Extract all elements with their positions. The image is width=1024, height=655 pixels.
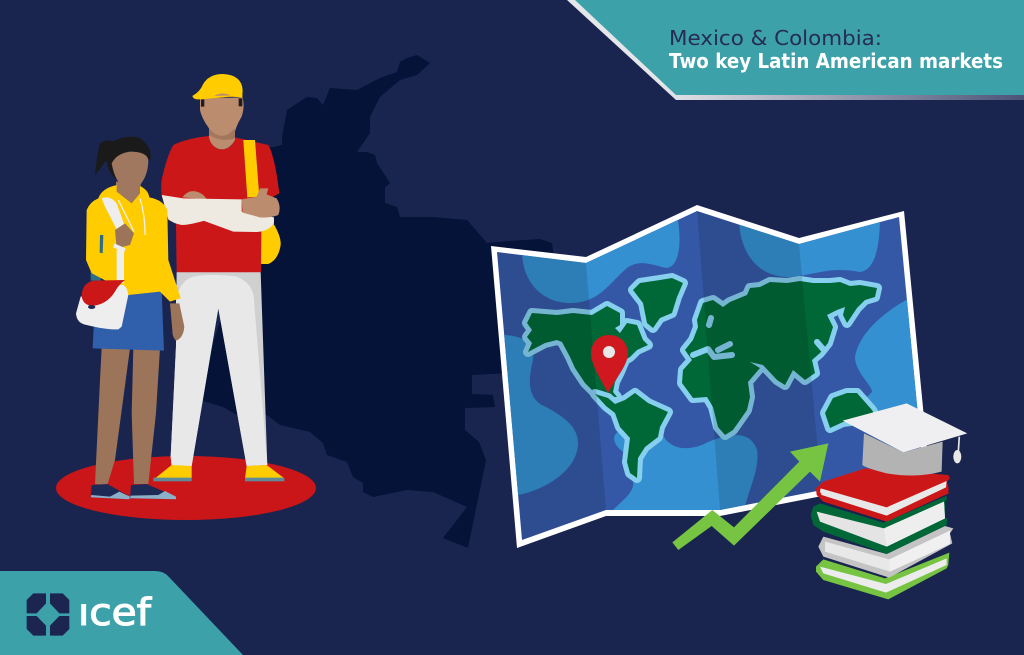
water patches	[490, 215, 930, 515]
continent: South America	[595, 393, 668, 478]
trousers	[153, 272, 284, 481]
straps and drawstrings	[102, 197, 125, 231]
bag	[260, 223, 281, 264]
icon: icef logo mark	[27, 593, 69, 636]
inland seas	[693, 318, 823, 357]
book: red	[816, 468, 950, 522]
continent: Greenland	[633, 278, 683, 328]
map sea base	[497, 211, 922, 540]
torso and head	[161, 74, 280, 272]
logo wordmark: icef	[78, 591, 152, 634]
logo panel	[0, 571, 243, 655]
Colombia silhouette	[200, 55, 560, 548]
red ellipse platform	[56, 456, 316, 520]
book: grey	[818, 526, 953, 578]
shoes	[155, 465, 192, 478]
legs and shoes	[91, 290, 184, 499]
continent: Australia	[825, 393, 880, 428]
stack of books	[811, 468, 953, 599]
arm	[170, 303, 184, 341]
figure: female student	[76, 137, 184, 499]
figure: male student	[153, 74, 284, 481]
book: dark green	[811, 496, 947, 554]
skirt	[93, 290, 164, 351]
shoulder bag	[76, 280, 128, 329]
heading line 1: Mexico & Colombia:	[669, 26, 882, 50]
continent: Eurasia and Africa	[682, 281, 877, 435]
icon: graduation cap	[843, 403, 967, 475]
fold shading	[497, 252, 606, 540]
heading line 2: Two key Latin American markets	[669, 49, 1003, 73]
hoodie and head	[86, 137, 181, 302]
continent: North America	[527, 306, 648, 397]
growth arrow	[672, 443, 828, 550]
header banner	[567, 0, 1024, 100]
continents	[527, 278, 880, 478]
book: light green	[816, 553, 949, 599]
crossed arms	[203, 212, 274, 232]
icon: location pin	[591, 335, 628, 393]
folded world map	[480, 200, 940, 550]
